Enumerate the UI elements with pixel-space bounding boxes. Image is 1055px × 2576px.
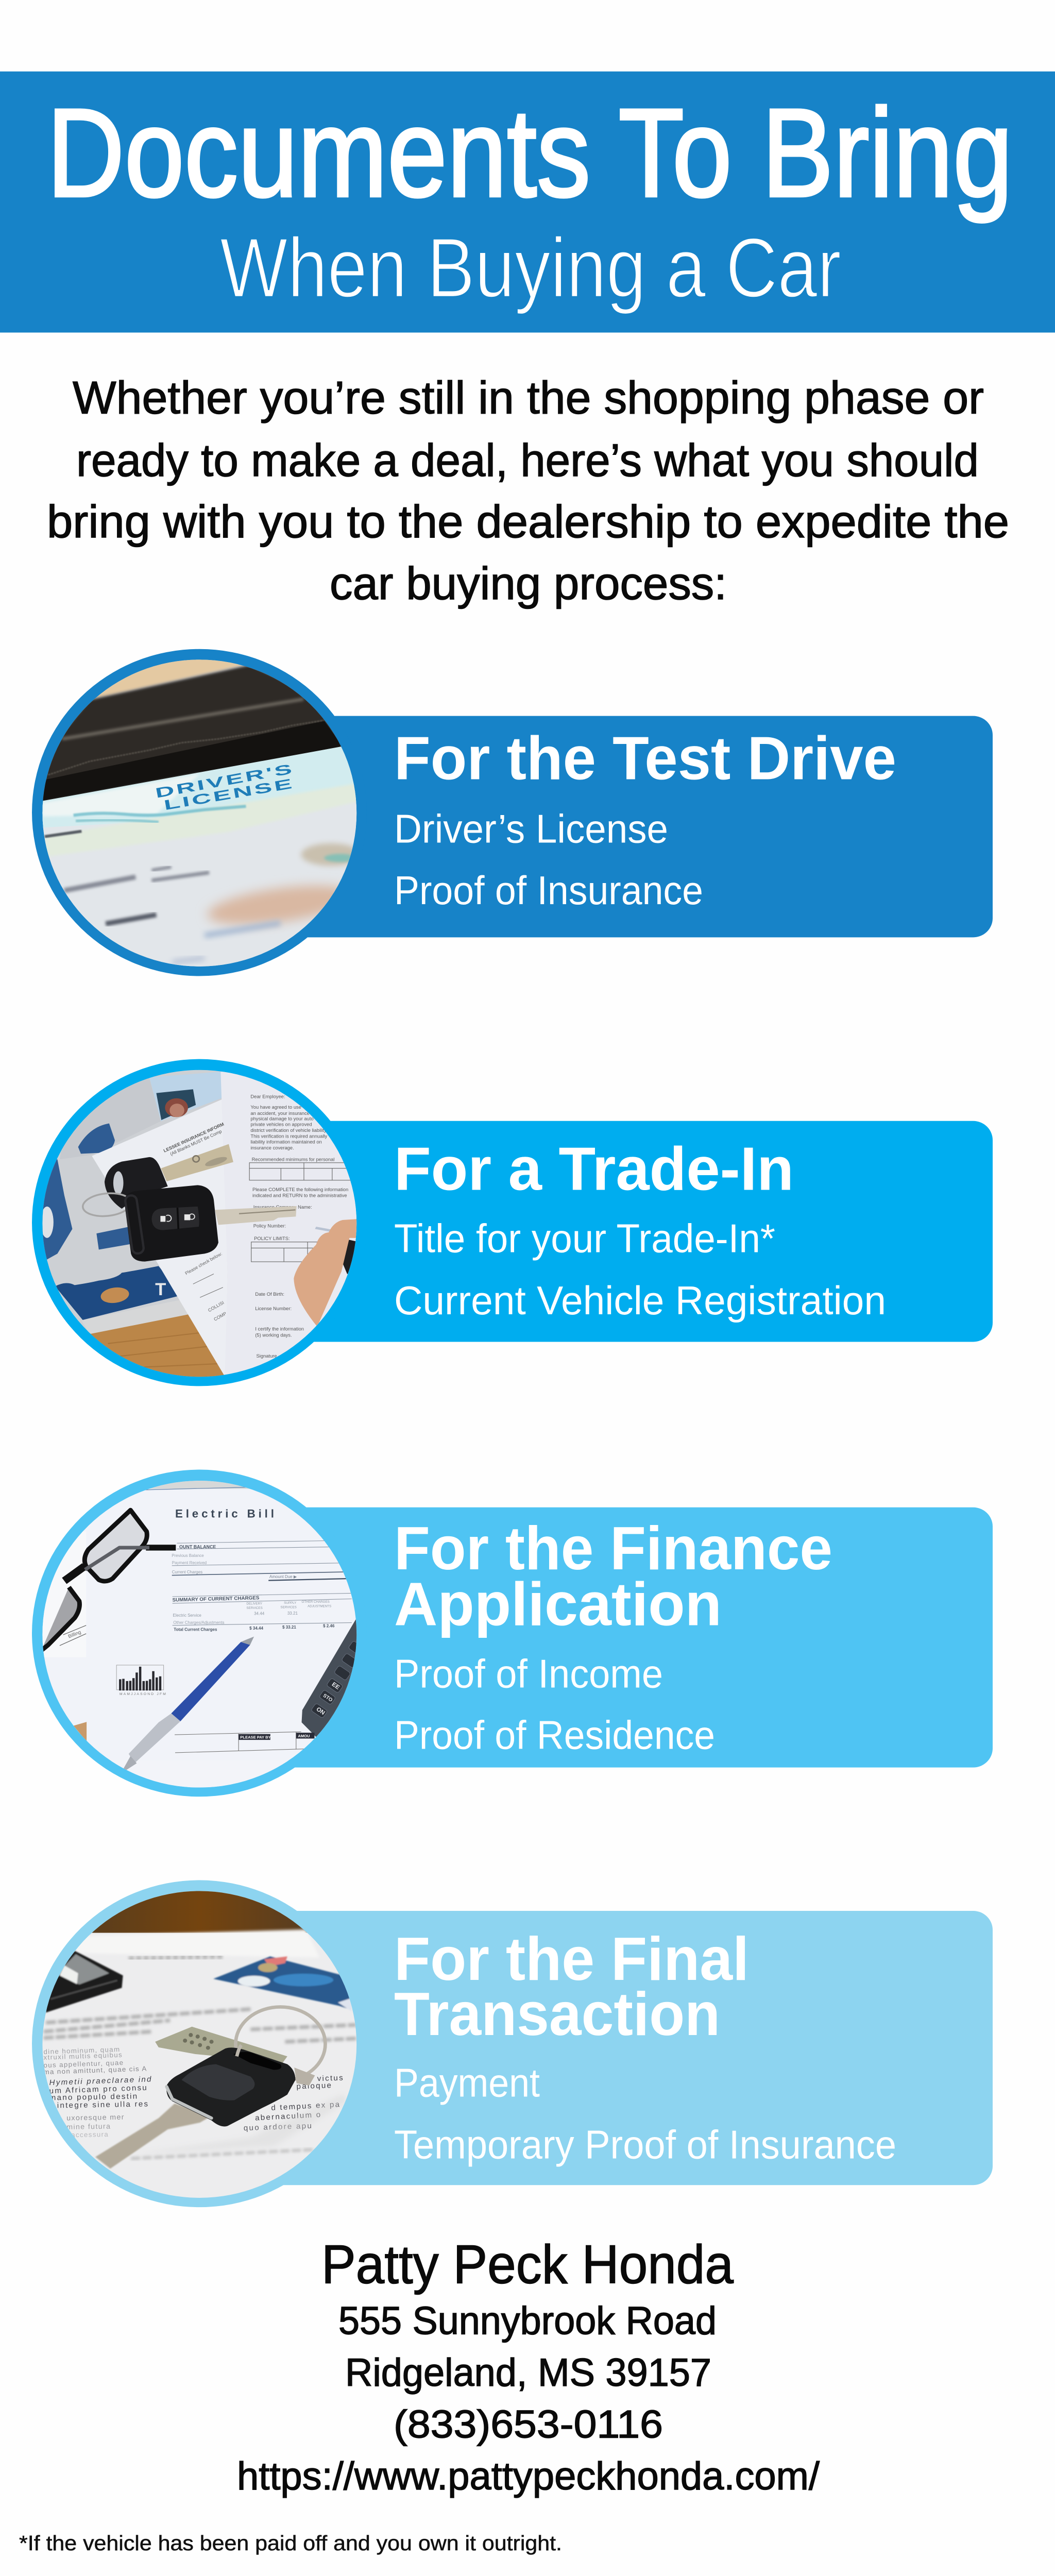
paper text: mano populo destin — [49, 2092, 138, 2102]
photo: electric bill with glasses, pen and calculator: SERVICES — [280, 1606, 297, 1609]
blurred credit card — [213, 1956, 352, 2011]
pen — [123, 1637, 254, 1770]
insurance form text: This verification is required annually — [250, 1134, 328, 1139]
item: payment: Payment — [394, 2060, 540, 2105]
photo: car keys, license plate and insurance form: COMP — [213, 1311, 227, 1322]
paper text: Hymetii praeclarae ind — [49, 2075, 152, 2087]
blurred text rows — [44, 2009, 359, 2042]
insurance form text: License Number: — [255, 1306, 292, 1311]
panel: for the final transaction — [232, 1911, 993, 2185]
address line 1: 555 Sunnybrook Road — [338, 2299, 717, 2343]
heading: for the finance application: Application — [394, 1570, 722, 1638]
item: current vehicle registration: Current Vehicle Registration — [394, 1278, 886, 1323]
panel: for the finance application — [232, 1507, 993, 1768]
paper text: , integre sine ulla res — [50, 2099, 149, 2110]
phone number: (833)653-0116 — [394, 2402, 663, 2446]
photo: electric bill with glasses, pen and calculator: OTHER CHARGES — [302, 1600, 330, 1604]
photo: electric bill with glasses, pen and calculator: Electric Service — [173, 1613, 201, 1618]
item: driver's license: Driver’s License — [394, 806, 668, 852]
photo: electric bill with glasses, pen and calculator: 33.21 — [287, 1611, 298, 1616]
small bar chart — [116, 1665, 167, 1696]
photo: electric bill with glasses, pen and calculator: Other Charges/Adjustments — [173, 1620, 225, 1625]
photo: electric bill with glasses, pen and calculator: $ 2.46 — [323, 1624, 335, 1629]
photo: electric bill with glasses, pen and calculator: Current Charges — [172, 1570, 202, 1574]
paper text: quo ardore apu — [244, 2122, 313, 2132]
dealership contact block — [237, 2234, 820, 2498]
insurance form text: Date Of Birth: — [255, 1292, 284, 1297]
photo: car keys, license plate and insurance form: COLLISI — [207, 1300, 225, 1313]
photo: electric bill with glasses, pen and calculator: 34.44 — [254, 1612, 265, 1616]
heading: for a trade-in: For a Trade-In — [394, 1134, 794, 1203]
insurance form text: physical damage to your auto — [250, 1116, 314, 1121]
calculator: ON — [315, 1706, 326, 1716]
paper text: d tempus ex pa — [271, 2100, 341, 2112]
item: proof of residence: Proof of Residence — [394, 1712, 715, 1757]
paper text: paloque — [296, 2081, 332, 2091]
subtitle: When Buying a Car — [220, 221, 841, 315]
hand with pen — [294, 1219, 361, 1327]
photo: electric bill with glasses, pen and calculator: $ 33.21 — [282, 1625, 296, 1630]
insurance form text: Dear Employee: — [250, 1094, 285, 1099]
paper text: um Africam pro consu — [49, 2083, 148, 2095]
insurance form text: I certify the information — [255, 1327, 304, 1331]
paper text: mine futura — [66, 2122, 111, 2131]
bill text: Electric Bill — [175, 1507, 274, 1520]
heading: for the finance application — [394, 1514, 832, 1638]
photo: driver's license in wallet — [32, 649, 356, 976]
item: temporary proof of insurance: Temporary Proof of Insurance — [394, 2122, 896, 2167]
blurred phone — [41, 1951, 123, 2012]
calculator: STO — [322, 1693, 334, 1703]
website: https://www.pattypeckhonda.com/ — [237, 2454, 820, 2498]
insurance form text: district verification of vehicle liability — [250, 1128, 327, 1133]
paper text — [43, 2045, 344, 2139]
calculator — [302, 1619, 356, 1737]
paper text: xtruxil multis equibus — [43, 2051, 123, 2061]
paper text: uxoresque mer — [66, 2113, 125, 2122]
intro paragraph: Whether you’re still in the shopping phase or — [73, 373, 984, 423]
payment stub: AMOU — [298, 1734, 310, 1738]
insurance form text: You have agreed to use — [250, 1105, 301, 1110]
insurance form text: Signature — [257, 1353, 277, 1359]
photo: electric bill with glasses, pen and calculator: SUPPLY — [284, 1601, 296, 1605]
item: proof of insurance: Proof of Insurance — [394, 868, 703, 913]
label on card — [156, 765, 292, 810]
heading: for the finance application: For the Finance — [394, 1514, 832, 1583]
panel: for a trade-in — [232, 1121, 993, 1342]
panel: for the test drive — [232, 716, 993, 937]
insurance form text — [250, 1094, 348, 1359]
small bar chart: MAMJJASOND JFM — [120, 1692, 167, 1696]
paper text: abernaculum o — [255, 2110, 322, 2123]
insurance form text: Insurance Company Name: — [253, 1205, 312, 1210]
insurance form text: private vehicles on approved — [250, 1122, 312, 1127]
address line 2: Ridgeland, MS 39157 — [345, 2351, 711, 2395]
paper text: dine hominum, quam — [43, 2045, 121, 2056]
payment stub — [175, 1732, 314, 1753]
photo: car keys, license plate and insurance form: LESSEE INSURANCE INFORM — [163, 1122, 225, 1154]
photo: electric bill with glasses, pen and calculator: DELIVERY — [246, 1602, 262, 1606]
insurance form text: Recommended minimums for personal — [252, 1157, 334, 1162]
photo: keys and credit card on paperwork — [32, 1880, 356, 2207]
intro paragraph: bring with you to the dealership to expedite the — [47, 497, 1009, 548]
paper text: ma non amittunt, quae cis A — [43, 2064, 147, 2076]
keys — [81, 1144, 297, 1262]
photo: electric bill with glasses, pen and calculator: OUNT BALANCE — [179, 1544, 216, 1549]
header banner — [0, 72, 1055, 333]
insurance form text: insurance coverage. — [250, 1145, 294, 1150]
item: proof of income: Proof of Income — [394, 1651, 663, 1696]
insurance form text: Policy Number: — [253, 1223, 286, 1228]
photo: electric bill with glasses, pen and calculator: ADJUSTMENTS — [308, 1605, 331, 1608]
insurance form text: Please COMPLETE the following information — [252, 1187, 348, 1192]
photo: electric bill with glasses, pen and calculator: Previous Balance — [172, 1553, 204, 1558]
paper text: victus — [317, 2074, 344, 2083]
footnote: *If the vehicle has been paid off and you own it outright. — [19, 2531, 562, 2555]
heading: for the final transaction: Transaction — [394, 1979, 720, 2048]
photo: electric bill with glasses, pen and calculator: SUMMARY OF CURRENT CHARGES — [172, 1595, 260, 1603]
photo: car keys, license plate and insurance form: (All Blanks MUST Be Comp — [169, 1129, 223, 1157]
label on card: LICENSE — [163, 775, 295, 813]
insurance form text: indicated and RETURN to the administrative — [252, 1193, 347, 1198]
glasses — [41, 1510, 176, 1651]
photo: electric bill with glasses, pen and calculator: Total Current Charges — [174, 1627, 217, 1632]
paper text: ous appellentur, quae — [43, 2059, 124, 2069]
insurance form text: POLICY LIMITS: — [254, 1236, 290, 1241]
photo: electric bill with glasses, pen and calculator: Amount Due ▶ — [269, 1574, 297, 1579]
photo: car keys, license plate and insurance form: Please check below: — [184, 1251, 223, 1276]
heading: for the test drive: For the Test Drive — [394, 724, 896, 792]
heading: for the final transaction — [394, 1924, 749, 2048]
paper text: accessura — [71, 2130, 109, 2139]
photo: electric bill with glasses, pen and calculator: Payment Received — [172, 1561, 207, 1565]
photo: electric bill with glasses, pen and calculator: $ 34.44 — [249, 1626, 264, 1631]
payment stub: PLEASE PAY BY — [240, 1735, 271, 1739]
photo: electric bill with glasses, pen and calculator: SERVICES — [246, 1606, 263, 1610]
photo: car keys, license plate and insurance form: T — [155, 1280, 166, 1299]
intro paragraph — [47, 373, 1009, 609]
dealership name: Patty Peck Honda — [321, 2234, 734, 2295]
calculator: EE — [331, 1681, 341, 1691]
photo: electric bill with glasses, pen and calculator: Billing — [67, 1630, 82, 1639]
insurance form text: liability information maintained on — [250, 1140, 322, 1145]
heading: for the final transaction: For the Final — [394, 1924, 749, 1993]
item: title for your trade-in: Title for your Trade-In* — [394, 1216, 775, 1261]
intro paragraph: ready to make a deal, here’s what you should — [76, 435, 979, 486]
photo: electric bill with glasses, pen and calculator — [32, 1469, 356, 1797]
insurance form text: an accident, your insurance — [250, 1111, 310, 1116]
key — [95, 2007, 325, 2168]
photo: car keys, license plate and insurance form — [32, 1059, 356, 1386]
intro paragraph: car buying process: — [330, 558, 727, 609]
insurance form text: (5) working days. — [255, 1333, 292, 1338]
label on card: DRIVER'S — [154, 760, 295, 801]
